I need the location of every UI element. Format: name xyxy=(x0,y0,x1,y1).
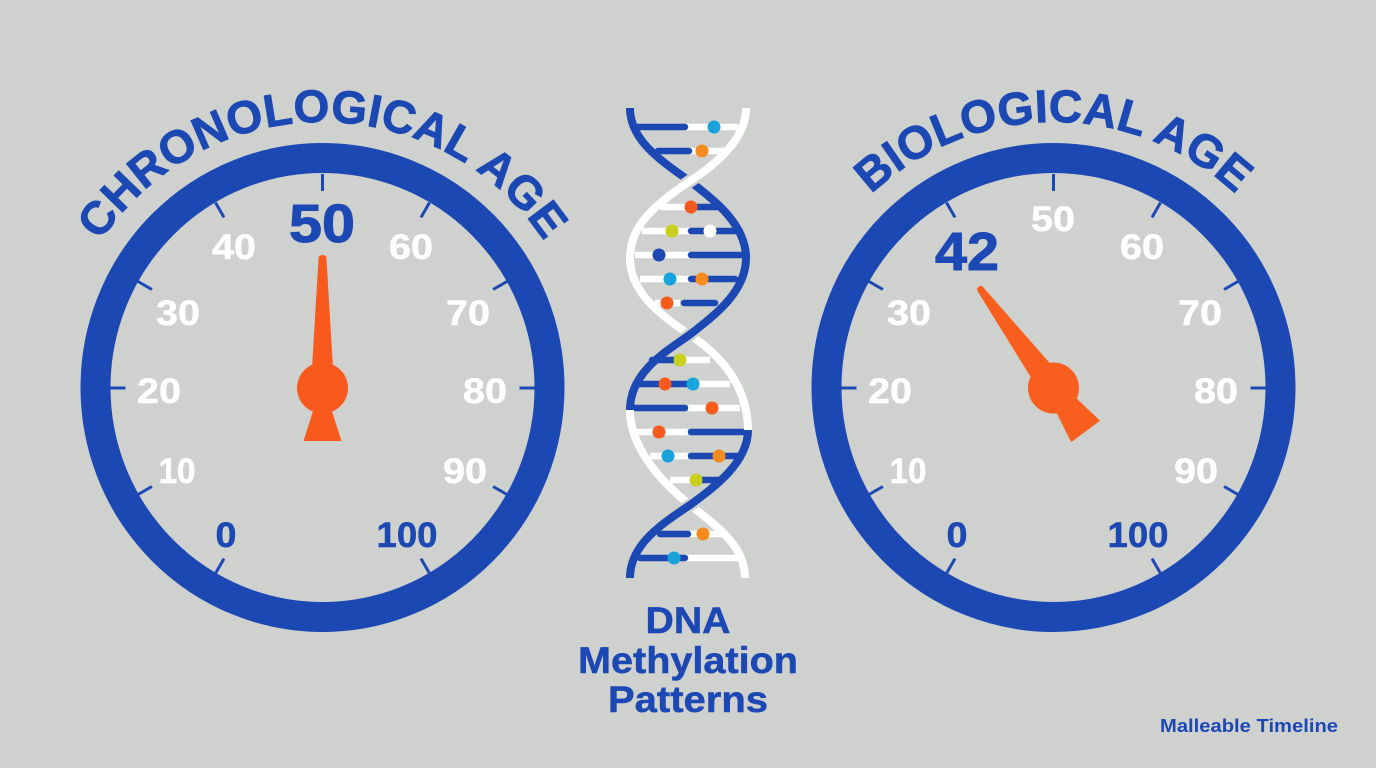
title: biological age: BIOLOGICAL AGE xyxy=(852,90,1255,194)
scale labels: 50 xyxy=(1031,200,1075,239)
scale labels xyxy=(137,228,507,555)
scale labels: 20 xyxy=(868,372,912,411)
panel: DNA helix xyxy=(578,108,798,720)
methylation dots xyxy=(652,120,726,564)
scale labels: 100 xyxy=(1108,516,1168,555)
scale labels: 10 xyxy=(890,452,926,491)
DNA heading: Methylation xyxy=(578,640,798,681)
helix rungs xyxy=(632,127,745,558)
scale labels: 90 xyxy=(1174,452,1218,491)
tick marks xyxy=(840,174,1268,573)
white strand xyxy=(630,108,748,578)
scale labels: 60 xyxy=(1120,228,1164,267)
scale labels: 20 xyxy=(137,372,181,411)
scale labels xyxy=(868,200,1238,555)
scale labels: 10 xyxy=(158,452,196,491)
DNA heading xyxy=(578,600,798,720)
panel: chronological age gauge xyxy=(80,90,569,632)
needle at 50 xyxy=(297,255,348,441)
gauge ring xyxy=(96,158,550,617)
tick marks xyxy=(108,174,536,573)
footer label: Malleable Timeline xyxy=(1160,715,1338,736)
needle at 42 xyxy=(958,272,1106,447)
gauge ring xyxy=(826,158,1280,617)
scale labels: 0 xyxy=(946,516,968,555)
scale labels: 100 xyxy=(376,516,438,555)
blue strand xyxy=(630,108,748,578)
scale labels: 60 xyxy=(389,228,433,267)
title: chronological age: CHRONOLOGICAL AGE xyxy=(80,90,569,240)
scale labels: 70 xyxy=(1178,294,1222,333)
scale labels: 70 xyxy=(446,294,490,333)
scale labels: 80 xyxy=(1194,372,1238,411)
value: 50: 50 xyxy=(289,194,355,254)
scale labels: 30 xyxy=(156,294,200,333)
scale labels: 80 xyxy=(463,372,507,411)
scale labels: 30 xyxy=(887,294,931,333)
scale labels: 40 xyxy=(212,228,256,267)
scale labels: 90 xyxy=(443,452,487,491)
DNA heading: Patterns xyxy=(608,679,768,720)
scale labels: 0 xyxy=(216,516,236,555)
strand crossings xyxy=(669,174,709,519)
panel: biological age gauge xyxy=(812,90,1296,632)
DNA heading: DNA xyxy=(646,600,730,641)
value: 42: 42 xyxy=(935,222,999,282)
